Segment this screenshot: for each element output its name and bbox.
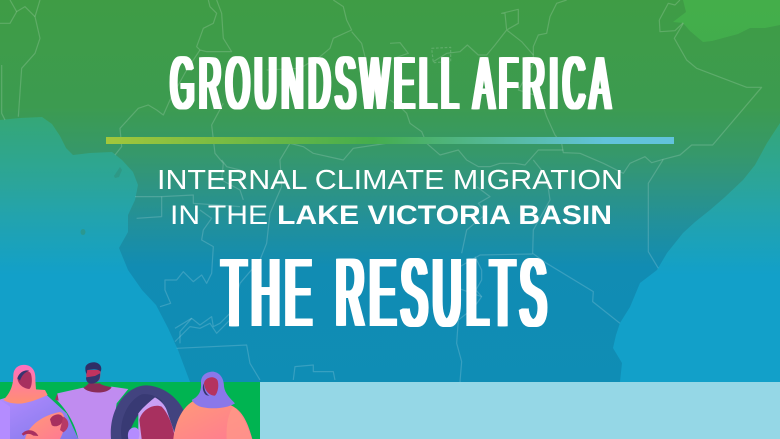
person: woman in pink headscarf holding a baby xyxy=(0,365,78,439)
map: Red Sea and Gulf of Aden xyxy=(673,0,780,42)
map: Indian Ocean xyxy=(613,123,780,382)
map: Bioko island xyxy=(114,167,122,178)
illustration: group of people xyxy=(0,362,252,439)
borders: west and central Africa xyxy=(0,0,387,342)
wheel xyxy=(111,385,185,439)
borders: Congo and Angola xyxy=(160,160,335,380)
map: Atlantic Ocean xyxy=(0,117,190,382)
divider bar xyxy=(106,137,674,144)
heading: the results: THE RESULTS xyxy=(218,238,548,347)
borders: east Africa xyxy=(390,0,762,415)
map: islands xyxy=(80,167,122,235)
subtitle line two: LAKE VICTORIA BASIN xyxy=(277,200,612,230)
green footer panel xyxy=(0,382,260,439)
person: man with beard xyxy=(55,362,128,439)
subtitle line two: IN THE xyxy=(170,200,268,230)
map: small island xyxy=(80,229,86,235)
person: woman in purple headscarf xyxy=(173,372,252,439)
title: GROUNDSWELL AFRICA xyxy=(168,41,612,125)
subtitle line one: INTERNAL CLIMATE MIGRATION xyxy=(157,164,623,195)
light blue footer panel xyxy=(260,382,780,439)
